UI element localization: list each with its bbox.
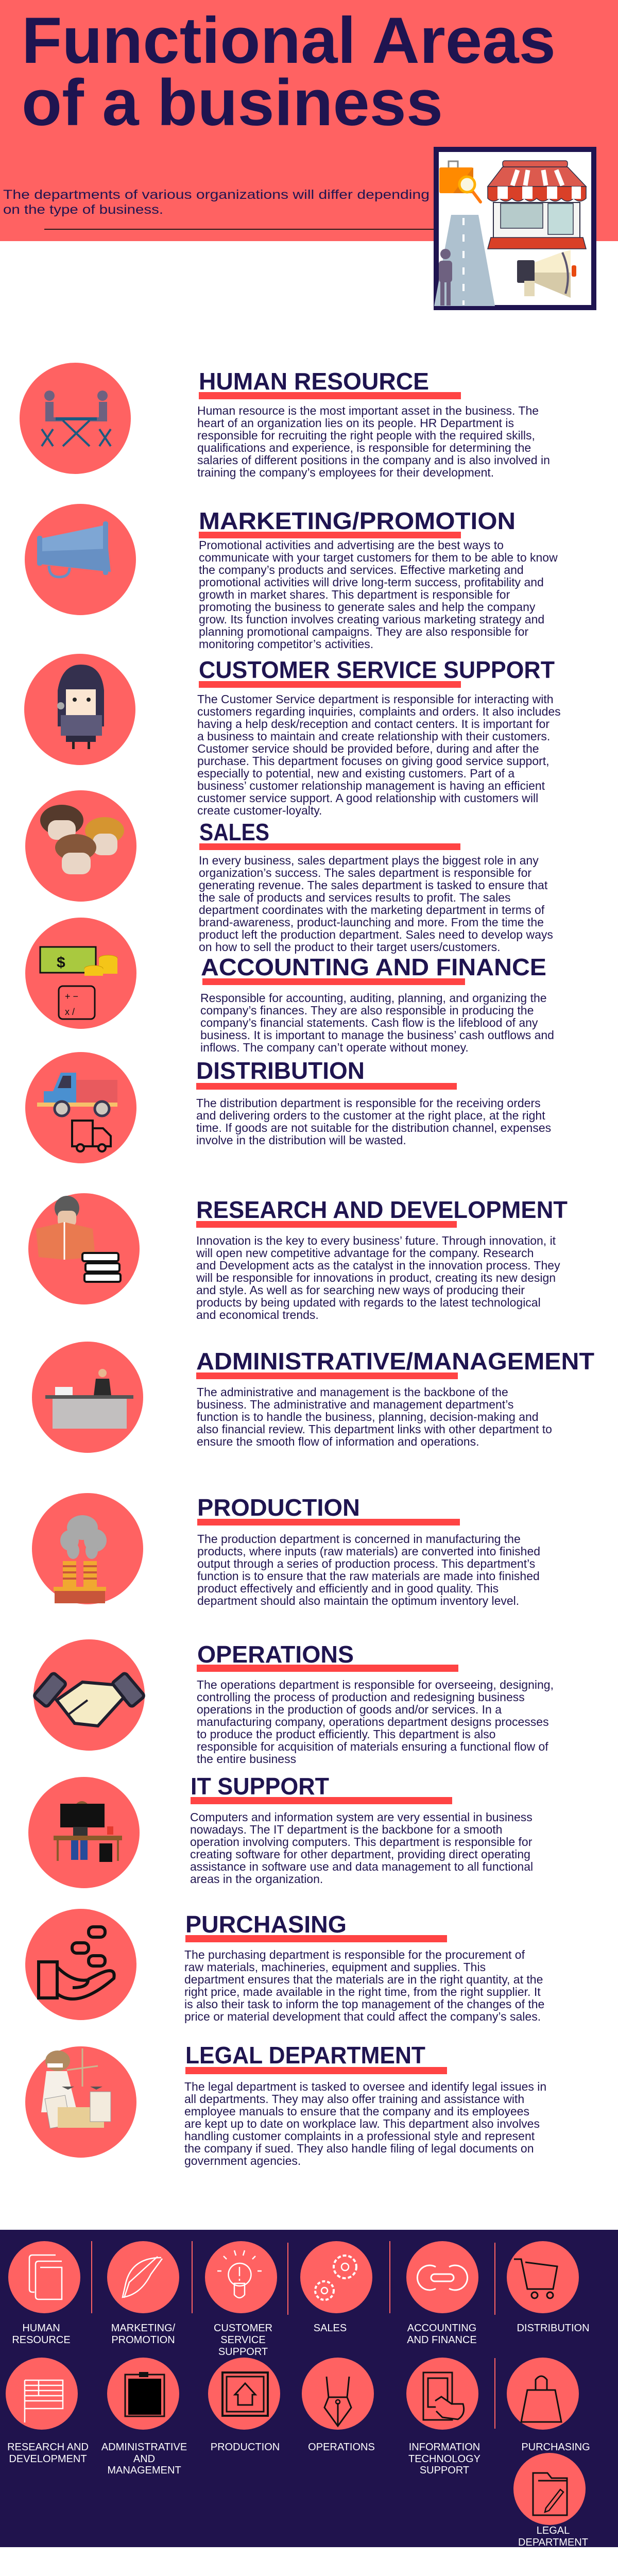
- section: production: [32, 1493, 540, 1607]
- text: production: function is to ensure that the raw materials are made into finished: [197, 1569, 540, 1583]
- header panel: [0, 0, 618, 241]
- label: row 1: ACCOUNTING: [407, 2323, 476, 2334]
- text: HR: qualifications and experience, is responsible for determining the: [197, 441, 531, 454]
- text: production: [197, 1532, 540, 1607]
- text: administrative: function is to handle the business, planning, decision-making and: [197, 1410, 539, 1423]
- text: purchasing: [184, 1948, 544, 2023]
- text: production: output through a series of production process. This department’s: [197, 1557, 535, 1570]
- text: customer service: having a help desk/reception and contact centers. It is important for: [197, 717, 550, 731]
- text: sales: generating revenue. The sales department is tasked to ensure that: [199, 878, 548, 892]
- icon: handshake: [33, 1639, 145, 1751]
- icon: HR books: [8, 2241, 80, 2313]
- text: research and development: products by being updated with regards to the latest technological: [196, 1296, 541, 1309]
- icon: support agent: [24, 654, 135, 765]
- heading: legal: LEGAL DEPARTMENT: [185, 2042, 425, 2069]
- label: row 2: INFORMATION: [409, 2442, 480, 2453]
- text: accounting: Responsible for accounting, auditing, planning, and organizing the: [200, 991, 547, 1005]
- text: marketing: growth in market shares. This department is responsible for: [199, 588, 510, 601]
- sections block 1: [20, 363, 561, 817]
- text: operations: operations in the production of goods and/or services. In a: [197, 1703, 502, 1716]
- label: row 1: HUMAN: [22, 2323, 60, 2334]
- subtitle: The departments of various organizations will differ depending: [3, 188, 430, 202]
- label: row 1: DISTRIBUTION: [517, 2323, 590, 2334]
- icon: chain link: [406, 2241, 478, 2313]
- text: production: product effectively and efficiently and in good quality. This: [197, 1582, 499, 1595]
- label: row 2: [7, 2442, 590, 2476]
- text: administrative: [197, 1385, 552, 1448]
- icon: framed house: [208, 2358, 280, 2430]
- label: row 1: MARKETING/: [111, 2323, 176, 2334]
- text: customer service: [197, 692, 561, 817]
- text: accounting: company’s finances. They are also responsible in producing the: [200, 1004, 534, 1017]
- text: distribution: and delivering orders to the customer at the right place, at the right: [196, 1109, 545, 1122]
- text: operations: controlling the process of production and redesigning business: [197, 1690, 525, 1704]
- section: research and development: [28, 1193, 568, 1321]
- text: customer service: especially to potential, new and existing customers. Part of a: [197, 767, 514, 780]
- text: production: The production department is concerned in manufacturing the: [197, 1532, 521, 1546]
- text: HR: heart of an organization lies on its people. HR Department is: [197, 416, 514, 430]
- icon: touch tablet: [406, 2358, 478, 2430]
- text: IT support: assistance in software use and data management to all functional: [190, 1860, 533, 1873]
- heading: research and development: RESEARCH AND DEVELOPMENT: [196, 1196, 568, 1223]
- heading: distribution: DISTRIBUTION: [196, 1057, 365, 1084]
- text: HR: Human resource is the most important asset in the business. The: [197, 404, 539, 417]
- panel: department summary icons: [0, 2230, 618, 2548]
- text: legal: handling customer complaints in a professional style and represent: [184, 2129, 535, 2143]
- text: IT support: areas in the organization.: [190, 1872, 323, 1886]
- text: marketing: communicate with your target customers for them to be able to know: [199, 551, 558, 564]
- text: production: products, where inputs (raw materials) are converted into finished: [197, 1545, 540, 1558]
- text: customer service: a business to maintain and create relationship with their customers.: [197, 730, 550, 743]
- subtitle: on the type of business.: [3, 202, 163, 217]
- text: administrative: also financial review. This department links with other department to: [197, 1422, 552, 1436]
- text: research and development: and style. As well as for searching new ways of producing their: [196, 1283, 525, 1297]
- icon: HR meeting: [20, 363, 131, 474]
- text: sales: organization’s success. The sales department is responsible for: [199, 866, 531, 879]
- icon: road and person: [434, 215, 495, 306]
- label: row 1: AND FINANCE: [407, 2334, 477, 2346]
- icon: legal folder: [513, 2453, 586, 2525]
- text: HR: responsible for recruiting the right people with the required skills,: [197, 429, 535, 442]
- heading: accounting: ACCOUNTING AND FINANCE: [201, 954, 546, 980]
- text: sales: In every business, sales department plays the biggest role in any: [199, 854, 539, 867]
- icon: clipboard: [107, 2358, 179, 2430]
- section: human resource: [20, 363, 550, 479]
- section: customer service: [24, 654, 561, 817]
- label: row 1: SALES: [314, 2323, 347, 2334]
- text: marketing: [199, 538, 558, 651]
- heading: purchasing: PURCHASING: [185, 1911, 347, 1938]
- label: row 1: RESOURCE: [12, 2334, 71, 2346]
- text: legal: employee manuals to ensure that the company and its employees: [184, 2105, 529, 2118]
- text: sales: on how to sell the product to their target users/customers.: [199, 940, 501, 954]
- icon: hand with coins: [25, 1909, 136, 2020]
- text: accounting: company’s financial statements. Cash flow is the lifeblood of any: [200, 1016, 538, 1029]
- text: customer service: create customer-loyalty.: [197, 804, 322, 817]
- label: row 1: CUSTOMER: [214, 2323, 272, 2334]
- text: legal: are kept up to date on workplace law. This department also involves: [184, 2117, 540, 2130]
- text: marketing: grow. Its function involves creating various marketing strategy and: [199, 613, 544, 626]
- text: legal: government agencies.: [184, 2154, 301, 2167]
- icon: lightbulb: [205, 2241, 277, 2313]
- section: distribution: [25, 1052, 551, 1163]
- text: HR: salaries of different positions in the company and is also involved in: [197, 453, 550, 467]
- text: customer service: customers regarding inquiries, complaints and orders. It also includes: [197, 705, 561, 718]
- icon: storefront: [488, 161, 586, 249]
- label: row 1: [12, 2323, 590, 2358]
- text: customer service: Customer service should be provided before, during and after the: [197, 742, 539, 755]
- text: production: department should also maintain the optimum inventory level.: [197, 1594, 519, 1607]
- section: marketing: [25, 504, 558, 651]
- icon: briefcase and magnifier: [439, 161, 480, 202]
- label: row 2: ADMINISTRATIVE: [101, 2442, 187, 2453]
- icon: pen nib: [302, 2358, 374, 2430]
- icon: shopping bag: [507, 2358, 579, 2430]
- text: operations: The operations department is responsible for overseeing, designing,: [197, 1678, 554, 1691]
- label: row 1: PROMOTION: [111, 2334, 175, 2346]
- label: row 2: MANAGEMENT: [107, 2465, 181, 2476]
- header illustration: shop: [434, 147, 596, 310]
- heading: production: [197, 1494, 460, 1526]
- text: purchasing: department ensures that the materials are in the right quantity, at the: [184, 1973, 543, 1986]
- header area: [0, 0, 618, 310]
- subtitle: [3, 188, 430, 217]
- heading: sales: SALES: [199, 819, 269, 845]
- label: row 1: SERVICE: [220, 2334, 266, 2346]
- sections block 4: [28, 1639, 554, 1888]
- text: distribution: [196, 1096, 551, 1147]
- text: marketing: planning promotional campaigns. They are also responsible for: [199, 625, 528, 638]
- text: marketing: the company’s products and services. Effective marketing and: [199, 563, 524, 577]
- icon: gears: [300, 2241, 372, 2313]
- sections block 2: [25, 790, 554, 1163]
- text: purchasing: is also their task to inform the top management of the changes of the: [184, 1997, 544, 2011]
- text: IT support: Computers and information system are very essential in business: [190, 1810, 533, 1824]
- heading: customer service: CUSTOMER SERVICE SUPPORT: [199, 656, 555, 683]
- icon: three customers: [25, 790, 136, 902]
- text: operations: manufacturing company, operations department designs processes: [197, 1715, 549, 1728]
- icon: megaphone: [517, 250, 576, 298]
- text: legal: The legal department is tasked to oversee and identify legal issues in: [184, 2080, 546, 2093]
- text: research and development: and economical trends.: [196, 1308, 319, 1321]
- section: IT support: [28, 1773, 533, 1888]
- text: operations: the entire business: [197, 1752, 296, 1766]
- text: purchasing: raw materials, machineries, equipment and supplies. This: [184, 1960, 486, 1974]
- text: distribution: involve in the distribution will be wasted.: [196, 1133, 406, 1147]
- sections block 5: [25, 1909, 546, 2167]
- text: IT support: operation involving computers. This department is responsible for: [190, 1835, 533, 1849]
- section: legal: [25, 2042, 546, 2167]
- label: row 2: PURCHASING: [521, 2442, 590, 2453]
- text: IT support: [190, 1810, 533, 1886]
- heading: HR: HUMAN RESOURCE: [199, 368, 429, 395]
- text: marketing: promotional activities will drive long-term success, profitability and: [199, 575, 544, 589]
- text: operations: [197, 1678, 554, 1766]
- text: sales: brand-awareness, product-launching and more. From the time the: [199, 916, 544, 929]
- text: sales: the sale of products and services results to profit. The sales: [199, 891, 511, 904]
- heading: distribution: [196, 1057, 457, 1090]
- label: row 2: TECHNOLOGY: [408, 2453, 480, 2465]
- text: research and development: [196, 1234, 560, 1321]
- heading: marketing: MARKETING/PROMOTION: [199, 507, 516, 534]
- text: purchasing: The purchasing department is responsible for the procurement of: [184, 1948, 525, 1961]
- text: research and development: Innovation is the key to every business’ future. Through innovation, it: [196, 1234, 556, 1247]
- text: distribution: time. If goods are not suitable for the distribution channel, expenses: [196, 1121, 551, 1134]
- heading: sales: [199, 819, 460, 850]
- text: administrative: business. The administrative and management department’s: [197, 1398, 513, 1411]
- section: accounting: [25, 918, 554, 1054]
- text: legal: [184, 2080, 546, 2167]
- text: accounting: business. It is important to manage the business’ cash outflows and: [200, 1028, 554, 1042]
- icon: computer desk: [28, 1777, 140, 1888]
- label: row 2: OPERATIONS: [308, 2442, 375, 2453]
- icon: shopping cart: [507, 2241, 579, 2313]
- text: marketing: monitoring competitor’s activities.: [199, 637, 373, 651]
- section: purchasing: [25, 1909, 544, 2023]
- text: accounting: inflows. The company can’t operate without money.: [200, 1041, 469, 1054]
- section: administrative: [32, 1342, 594, 1453]
- heading: IT support: [191, 1773, 452, 1804]
- text: marketing: promoting the business to generate sales and help the company: [199, 600, 536, 614]
- label: row 2: RESEARCH AND: [7, 2442, 89, 2453]
- label: legal department: [518, 2525, 588, 2548]
- icon: money and calculator: $: [57, 954, 65, 971]
- heading: purchasing: [185, 1911, 447, 1942]
- text: customer service: business’ customer relationship management is having an efficient: [197, 779, 545, 792]
- footer area: [0, 2547, 618, 2576]
- title: of a business: [22, 66, 443, 139]
- text: HR: training the company’s employees for their development.: [197, 466, 494, 479]
- text: purchasing: price or material development that could affect the company’s sales.: [184, 2010, 541, 2023]
- text: research and development: will open new competitive advantage for the company. Research: [196, 1246, 534, 1260]
- heading: operations: [197, 1641, 458, 1672]
- label: row 2: SUPPORT: [420, 2465, 469, 2476]
- text: HR: [197, 404, 550, 479]
- section: sales: [25, 790, 553, 954]
- text: sales: department coordinates with the marketing department in terms of: [199, 903, 545, 917]
- icon: reader with books: [28, 1193, 140, 1304]
- heading: operations: OPERATIONS: [197, 1641, 354, 1668]
- icon: trucks: [25, 1052, 136, 1163]
- icon: marketing feather: [107, 2241, 179, 2313]
- heading: administrative: ADMINISTRATIVE/MANAGEMENT: [196, 1348, 594, 1375]
- text: customer service: customer service support. A good relationship with customers will: [197, 791, 538, 805]
- icon: flag: [6, 2358, 78, 2430]
- icon: money and calculator: [25, 918, 136, 1029]
- text: purchasing: right price, made available in the right time, from the right supplier. It: [184, 1985, 541, 1998]
- label: legal department: LEGAL: [537, 2525, 570, 2536]
- text: customer service: The Customer Service department is responsible for interacting with: [197, 692, 554, 706]
- icon: money and calculator: + −: [65, 991, 78, 1002]
- icon: factory: [32, 1493, 143, 1604]
- label: row 2: DEVELOPMENT: [9, 2453, 87, 2465]
- icon: money and calculator: x /: [65, 1007, 75, 1017]
- text: legal: the company if sued. They also handle filing of legal documents on: [184, 2142, 534, 2155]
- icon: reception desk: [32, 1342, 143, 1453]
- sections block 3: [28, 1193, 594, 1607]
- section: operations: [33, 1639, 554, 1766]
- text: research and development: and Development acts as the catalyst in the innovation process. They: [196, 1259, 560, 1272]
- text: operations: to produce the product efficiently. This department is also: [197, 1727, 495, 1741]
- label: row 2: PRODUCTION: [211, 2442, 280, 2453]
- label: row 2: AND: [133, 2453, 155, 2465]
- text: customer service: purchase. This department focuses on giving good service support,: [197, 754, 550, 768]
- text: legal: all departments. They may also offer training and assistance with: [184, 2092, 524, 2106]
- text: operations: responsible for acquisition of materials ensuring a functional flow of: [197, 1740, 548, 1753]
- text: administrative: ensure the smooth flow of information and operations.: [197, 1435, 479, 1448]
- text: administrative: The administrative and management is the backbone of the: [197, 1385, 508, 1399]
- text: marketing: Promotional activities and advertising are the best ways to: [199, 538, 504, 552]
- text: distribution: The distribution department is responsible for the receiving orders: [196, 1096, 541, 1110]
- text: research and development: will be responsible for innovations in product, creating its new design: [196, 1271, 556, 1284]
- heading: production: PRODUCTION: [197, 1494, 360, 1521]
- text: IT support: creating software for other department, providing direct operating: [190, 1848, 530, 1861]
- text: accounting: [200, 991, 554, 1054]
- text: sales: product left the production department. Sales need to develop ways: [199, 928, 553, 941]
- heading: IT support: IT SUPPORT: [191, 1773, 329, 1800]
- text: sales: [199, 854, 553, 954]
- title: [22, 4, 556, 139]
- icon: megaphone: [25, 504, 136, 615]
- icon: lady justice: [25, 2046, 136, 2158]
- label: row 1: SUPPORT: [218, 2346, 268, 2358]
- title: Functional Areas: [22, 4, 556, 77]
- label: legal department: DEPARTMENT: [518, 2537, 588, 2548]
- text: IT support: nowadays. The IT department is the backbone for a smooth: [190, 1823, 502, 1836]
